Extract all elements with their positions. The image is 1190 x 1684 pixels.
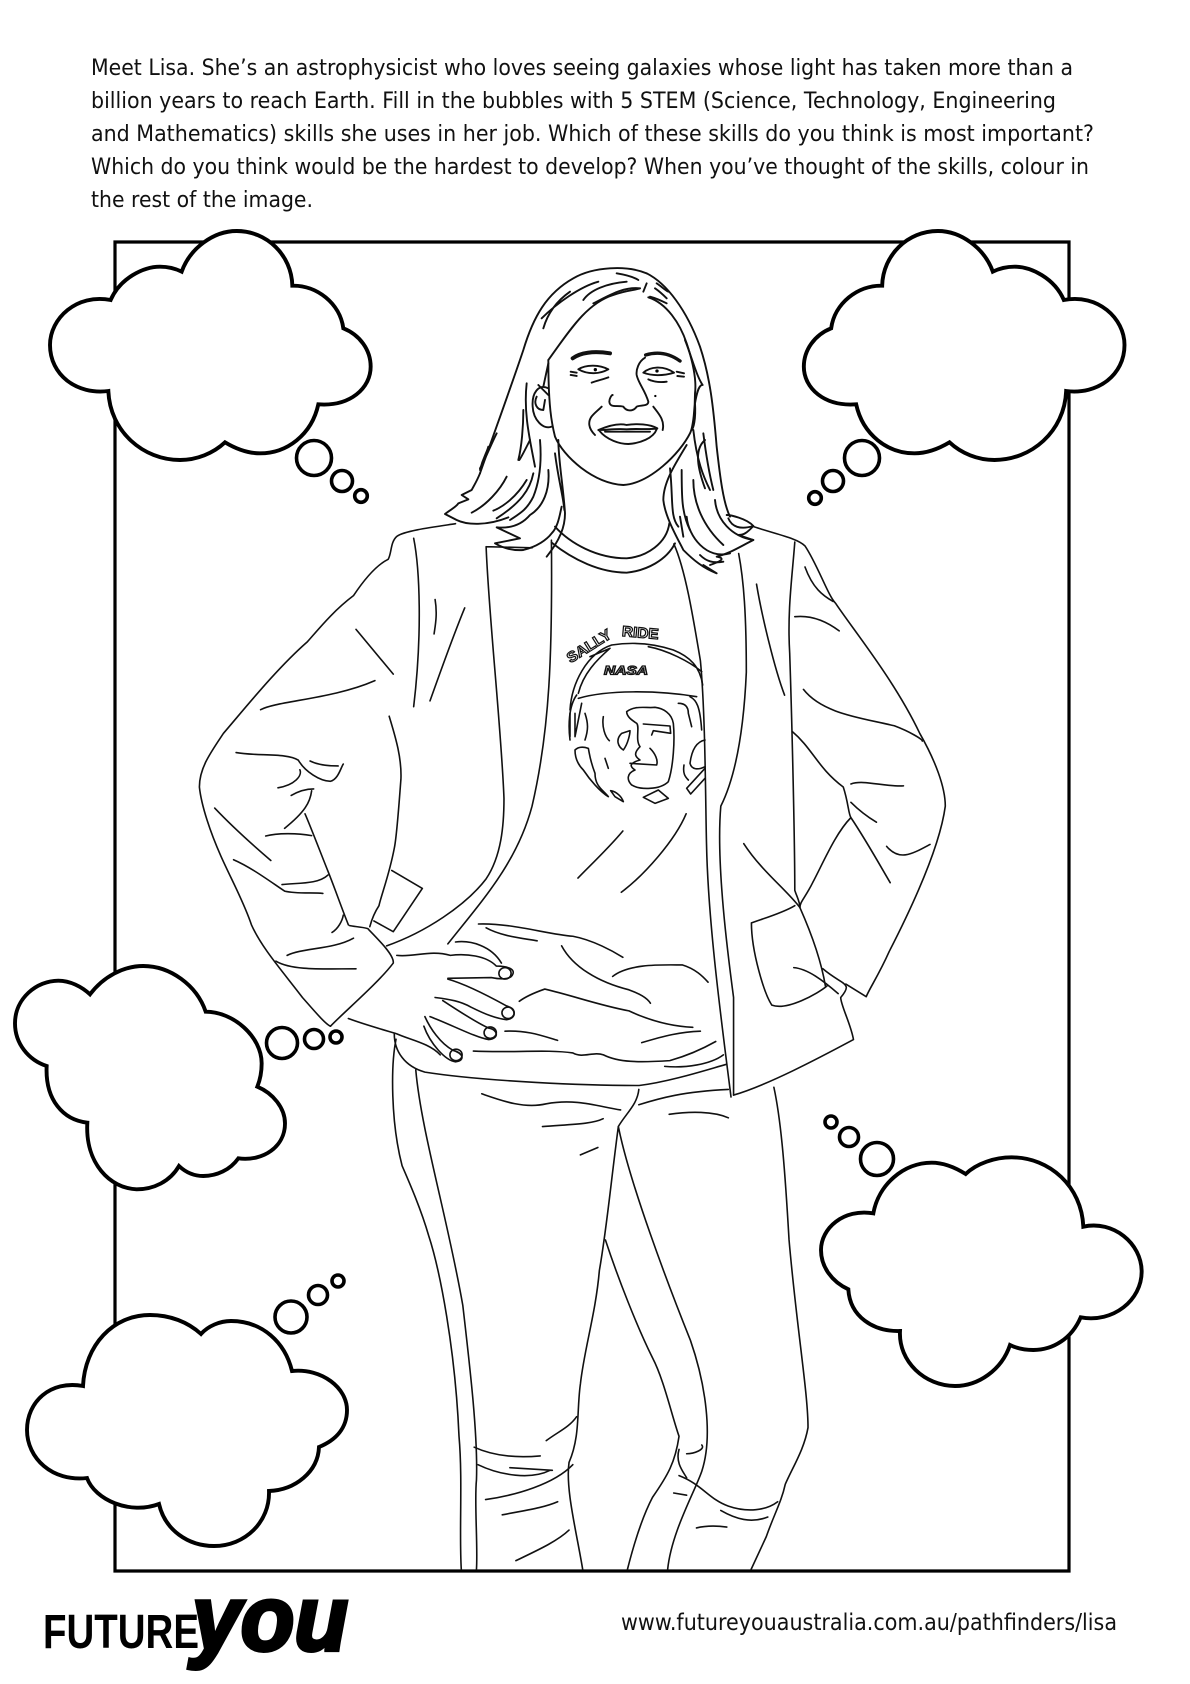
- thought bubble: lower right: [821, 1116, 1142, 1386]
- jacket, shirt and hand: [199, 524, 945, 1097]
- logo: Future You: [43, 1568, 348, 1670]
- t-shirt print: Sally Ride astronaut: [564, 624, 705, 803]
- thought bubble: bottom left: [27, 1275, 347, 1546]
- instructions text block: Which do you think would be the hardest to develop? When you’ve thought of the skills, colour in: [91, 154, 1089, 180]
- print lettering: RIDE: RIDE: [621, 624, 659, 643]
- instructions text block: and Mathematics) skills she uses in her job. Which of these skills do you think is most important?: [91, 121, 1094, 147]
- trousers: [393, 1039, 808, 1569]
- instructions text block: the rest of the image.: [91, 187, 313, 213]
- instructions text block: [91, 55, 1094, 213]
- print lettering: SALLY: SALLY: [564, 627, 615, 667]
- head and upper hair: [480, 268, 730, 517]
- print lettering: NASA: NASA: [604, 664, 648, 678]
- thought bubble: top left: [50, 231, 371, 502]
- figure: Lisa line drawing: [199, 268, 945, 1569]
- thought bubble: middle left: [15, 966, 342, 1189]
- logo: Future You: you: [188, 1568, 348, 1670]
- website address: www.futureyouaustralia.com.au/pathfinders/lisa: [621, 1610, 1117, 1636]
- thought bubble: top right: [804, 231, 1125, 504]
- instructions text block: billion years to reach Earth. Fill in the bubbles with 5 STEM (Science, Technology, Engineering: [91, 88, 1056, 114]
- instructions text block: Meet Lisa. She’s an astrophysicist who loves seeing galaxies whose light has taken more than a: [91, 55, 1073, 81]
- lower hair and neck collar: [445, 440, 753, 573]
- picture frame: [115, 242, 1069, 1571]
- logo: Future You: FUTURE: [43, 1606, 199, 1659]
